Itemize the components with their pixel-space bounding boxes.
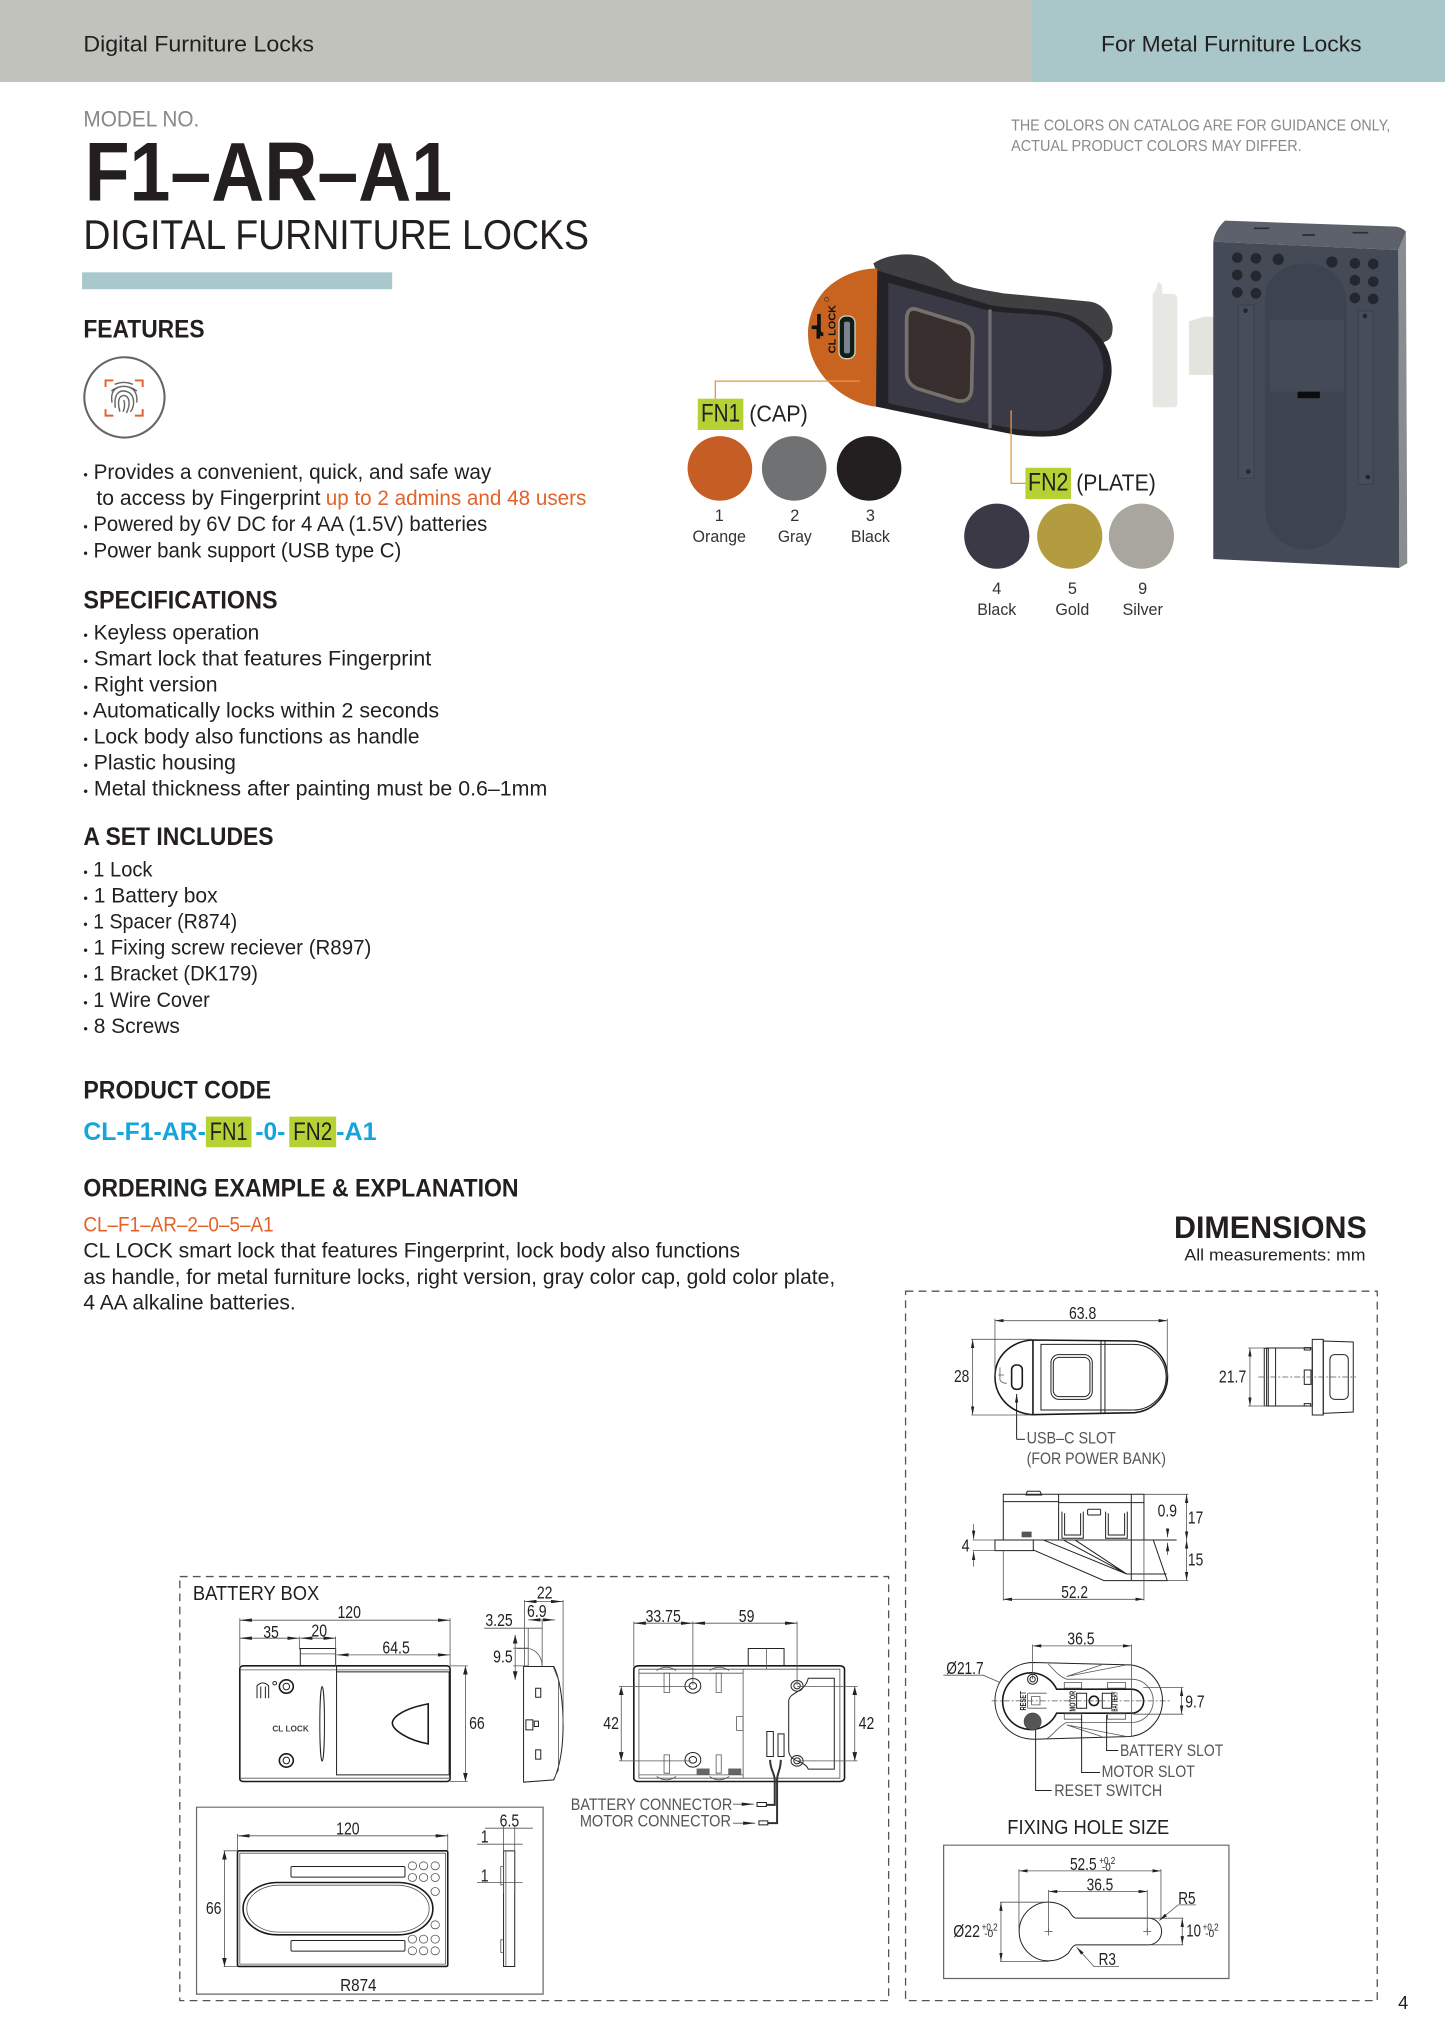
- drawing: front view and side views: 15: [1188, 1550, 1203, 1570]
- battery box labels: 120: [337, 1602, 361, 1622]
- drawing: rear view and fixing hole: 9.7: [1185, 1692, 1205, 1712]
- product image: lock: CL LOCK: [827, 304, 838, 353]
- drawing: front view and side views: 63.8: [1069, 1303, 1096, 1323]
- battery box labels: BATTERY CONNECTOR: [571, 1796, 732, 1814]
- battery box labels: [193, 1583, 874, 1995]
- specifications list: • Metal thickness after painting must be 0.6–1mm: [83, 778, 547, 801]
- drawing: front view and side views: (FOR POWER BANK): [1027, 1450, 1166, 1468]
- drawing: rear view and fixing hole: Ø22: [953, 1921, 980, 1941]
- header band: [0, 0, 1445, 82]
- drawing: rear view and fixing hole: [943, 1629, 1229, 1978]
- drawing: rear view and fixing hole: BATTERY: [1109, 1691, 1119, 1712]
- fn2 label: FN2: [1028, 470, 1068, 497]
- drawing: front view and side views: 21.7: [1219, 1367, 1246, 1387]
- battery box labels: 6.9: [527, 1601, 547, 1621]
- color disclaimer: THE COLORS ON CATALOG ARE FOR GUIDANCE ONLY,: [1011, 117, 1390, 134]
- drawing: rear view and fixing hole: +0.2: [1203, 1923, 1219, 1934]
- fn2 color swatches: 9: [1138, 580, 1147, 598]
- fn1 leader line: [715, 381, 860, 399]
- product image: lock: [808, 254, 1113, 437]
- ordering explanation: as handle, for metal furniture locks, right version, gray color cap, gold color plate,: [83, 1266, 835, 1289]
- battery box labels: 1: [481, 1826, 489, 1846]
- header right label: For Metal Furniture Locks: [1101, 31, 1362, 56]
- battery box labels: 120: [336, 1819, 360, 1839]
- drawing: rear view and fixing hole: +0.2: [1099, 1856, 1116, 1867]
- battery box labels: 3.25: [485, 1610, 513, 1630]
- drawing: rear view and fixing hole: RESET SWITCH: [1054, 1782, 1162, 1800]
- subtitle: DIGITAL FURNITURE LOCKS: [83, 211, 589, 258]
- drawing: spacer R874: [197, 1807, 543, 1994]
- heading: product code: PRODUCT CODE: [83, 1076, 271, 1104]
- drawing: rear view and fixing hole: -0: [1205, 1929, 1215, 1940]
- title: model number: F1–AR–A1: [85, 126, 452, 219]
- drawing: rear view and fixing hole: 36.5: [1087, 1875, 1113, 1895]
- header left panel: [0, 0, 1032, 82]
- fn1 color swatches: Gray: [778, 528, 813, 546]
- features list: up to 2 admins and 48 users: [326, 487, 586, 510]
- product code line: FN2: [293, 1119, 332, 1146]
- fn2 color swatches: Silver: [1123, 601, 1163, 619]
- fn1 label: FN1: [701, 400, 740, 427]
- fn1 color swatches: 2: [790, 507, 799, 525]
- battery box labels: 64.5: [382, 1637, 410, 1657]
- ordering explanation: [83, 1239, 835, 1314]
- page number: 4: [1398, 1992, 1408, 2013]
- specifications list: • Lock body also functions as handle: [83, 726, 420, 749]
- fn1 color swatches: [688, 436, 901, 546]
- fn2 leader line: [1011, 410, 1025, 483]
- set includes list: • 8 Screws: [83, 1015, 180, 1038]
- drawing: front view and side views: [954, 1303, 1356, 1602]
- product code line: CL-F1-AR-: [83, 1119, 206, 1146]
- fn2 color swatches: Gold: [1055, 601, 1089, 619]
- specifications list: • Automatically locks within 2 seconds: [83, 700, 439, 723]
- battery box labels: 42: [859, 1713, 874, 1733]
- battery box labels: 35: [263, 1622, 279, 1642]
- drawing: front view and side views: 0.9: [1158, 1501, 1177, 1521]
- drawing: rear view and fixing hole: +0.2: [982, 1923, 998, 1934]
- fn1 color swatches: Black: [851, 528, 891, 546]
- fn1 color swatches: 1: [715, 507, 724, 525]
- specifications list: • Right version: [83, 673, 218, 696]
- features list: • Provides a convenient, quick, and safe way: [83, 461, 492, 484]
- drawing: front view and side views: 28: [954, 1366, 969, 1386]
- battery box labels: 42: [603, 1713, 619, 1733]
- features list: • Power bank support (USB type C): [83, 540, 401, 563]
- specifications list: • Plastic housing: [83, 752, 236, 775]
- set includes list: • 1 Bracket (DK179): [83, 963, 258, 986]
- set includes list: • 1 Spacer (R874): [83, 911, 237, 934]
- fn2 label: [1025, 468, 1156, 499]
- battery box labels: 9.5: [493, 1647, 513, 1667]
- heading: features: FEATURES: [83, 315, 205, 343]
- drawing: rear view and fixing hole: -0: [984, 1929, 994, 1940]
- battery box labels: R874: [340, 1975, 377, 1995]
- set includes list: • 1 Fixing screw reciever (R897): [83, 937, 371, 960]
- drawing: rear view and fixing hole: 10: [1186, 1921, 1201, 1941]
- drawing: front view and side views: USB–C SLOT: [1027, 1430, 1116, 1448]
- specifications list: • Keyless operation: [83, 621, 259, 644]
- fn2 color swatches: [964, 504, 1174, 619]
- fn2 color swatches: Black: [977, 601, 1017, 619]
- features list: • Powered by 6V DC for 4 AA (1.5V) batteries: [83, 513, 487, 536]
- drawing: rear view and fixing hole: FIXING HOLE SIZE: [1007, 1817, 1169, 1839]
- fn1 color swatches: 3: [866, 507, 875, 525]
- measurement note: All measurements: mm: [1184, 1246, 1366, 1265]
- battery box labels: 1: [481, 1865, 489, 1885]
- header right panel: [1032, 0, 1445, 82]
- set includes list: • 1 Lock: [83, 858, 153, 881]
- fn1 color swatches: Orange: [693, 528, 746, 546]
- features list: to access by Fingerprint: [96, 487, 321, 510]
- fn2 color swatches: 4: [992, 580, 1001, 598]
- ordering explanation: CL LOCK smart lock that features Fingerprint, lock body also functions: [83, 1239, 740, 1262]
- specifications list: [83, 621, 547, 801]
- product code line: -A1: [336, 1119, 377, 1146]
- battery box labels: 33.75: [646, 1606, 681, 1626]
- spacer: [1153, 282, 1177, 407]
- drawing: rear view and fixing hole: MOTOR: [1067, 1690, 1077, 1712]
- drawing: rear view and fixing hole: BATTERY SLOT: [1120, 1742, 1223, 1760]
- battery box labels: 59: [739, 1606, 754, 1626]
- specifications list: • Smart lock that features Fingerprint: [83, 647, 431, 670]
- drawing: rear view and fixing hole: 52.5: [1070, 1854, 1097, 1874]
- drawing: rear view and fixing hole: 36.5: [1067, 1629, 1095, 1649]
- fn2 color swatches: 5: [1068, 580, 1077, 598]
- drawing: front view and side views: 52.2: [1061, 1582, 1088, 1602]
- model label: MODEL NO.: [83, 106, 199, 131]
- product image: spacer, latch block and battery box: [1153, 221, 1407, 568]
- header left label: Digital Furniture Locks: [83, 31, 314, 56]
- features list: [83, 461, 586, 563]
- panel: lock dimensions: [906, 1291, 1377, 2001]
- set includes list: • 1 Wire Cover: [83, 989, 210, 1012]
- latch block: [1189, 317, 1214, 375]
- drawing: rear view and fixing hole: -0: [1102, 1863, 1111, 1874]
- drawing: front view and side views: 4: [962, 1536, 970, 1556]
- drawing: rear view and fixing hole: MOTOR SLOT: [1102, 1763, 1195, 1781]
- drawing: front view and side views: 17: [1188, 1507, 1203, 1527]
- icon: fingerprint: [84, 357, 165, 438]
- battery box labels: 20: [311, 1620, 327, 1640]
- drawing: rear view and fixing hole: R5: [1178, 1888, 1196, 1908]
- fn1 label: [698, 399, 808, 430]
- battery box labels: 6.5: [500, 1811, 519, 1831]
- heading: specifications: SPECIFICATIONS: [83, 586, 278, 614]
- battery box labels: MOTOR CONNECTOR: [580, 1813, 731, 1831]
- battery box labels: BATTERY BOX: [193, 1583, 320, 1605]
- heading: a set includes: A SET INCLUDES: [83, 823, 274, 851]
- ordering explanation: 4 AA alkaline batteries.: [83, 1291, 296, 1314]
- battery box body: [1213, 221, 1407, 568]
- fn2 label: (PLATE): [1076, 470, 1156, 496]
- drawing: battery box views: [197, 1600, 858, 1994]
- product code line: -0-: [255, 1119, 285, 1146]
- accent bar: [82, 272, 392, 289]
- set includes list: • 1 Battery box: [83, 885, 218, 908]
- panel: battery box: [180, 1577, 889, 2001]
- battery box labels: 66: [469, 1713, 485, 1733]
- color disclaimer: ACTUAL PRODUCT COLORS MAY DIFFER.: [1011, 138, 1302, 155]
- battery box labels: CL LOCK: [272, 1725, 309, 1734]
- battery box labels: 22: [537, 1583, 552, 1603]
- drawing: rear view and fixing hole: R3: [1099, 1949, 1116, 1969]
- product code line: [83, 1117, 377, 1147]
- product code line: FN1: [210, 1119, 248, 1146]
- set includes list: [83, 858, 371, 1038]
- drawing: rear view and fixing hole: Ø21.7: [946, 1658, 984, 1678]
- battery box labels: 66: [206, 1898, 222, 1918]
- heading: dimensions: DIMENSIONS: [1174, 1210, 1367, 1245]
- ordering example code: CL–F1–AR–2–0–5–A1: [83, 1213, 274, 1236]
- heading: ordering example: ORDERING EXAMPLE & EXPLANATION: [83, 1175, 519, 1203]
- color disclaimer: [1011, 117, 1390, 155]
- fn1 label: (CAP): [749, 400, 808, 426]
- drawing: rear view and fixing hole: RESET: [1018, 1691, 1028, 1711]
